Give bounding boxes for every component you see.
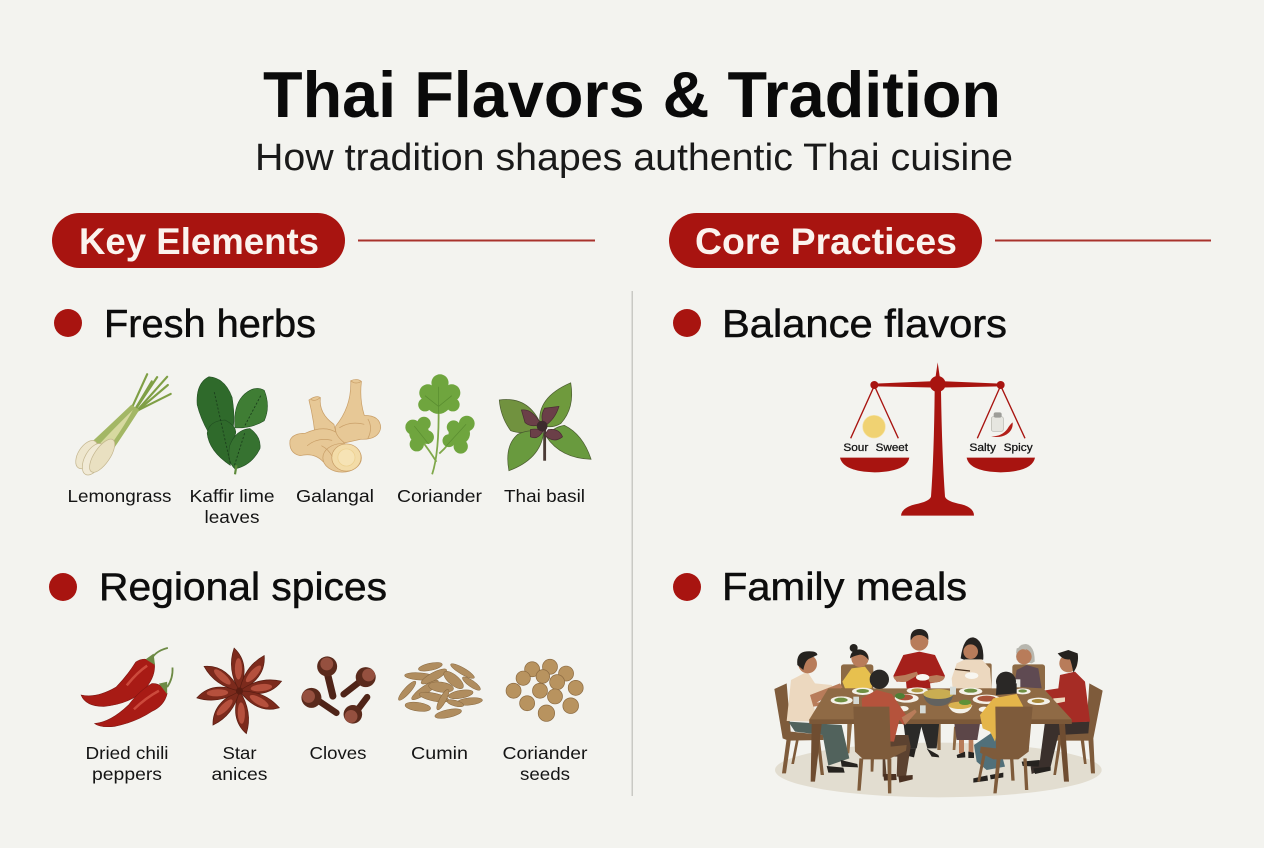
section heading: core practices [669, 213, 1211, 268]
label: star anices: Star [222, 743, 257, 763]
label: dried chili peppers [86, 743, 168, 784]
label: dried chili peppers: peppers [92, 764, 162, 784]
label: star anices [212, 743, 268, 784]
labels: sour and sweet: Sour [843, 442, 869, 454]
icon: dried chili peppers [81, 648, 173, 727]
label: kaffir lime leaves: leaves [204, 507, 260, 527]
person: front right child [973, 672, 1023, 783]
icon: coriander [405, 374, 475, 474]
labels: sour and sweet: Sweet [876, 442, 908, 454]
right chair [1053, 683, 1103, 775]
section heading: key elements [52, 213, 595, 268]
label: coriander seeds [502, 743, 588, 784]
subsection heading: balance flavors: Balance flavors [722, 303, 1007, 346]
section heading: key elements: Key Elements [79, 221, 319, 262]
chart: balance scale [840, 362, 1035, 516]
label: thai basil: Thai basil [504, 486, 585, 506]
section heading: core practices: Core Practices [695, 221, 957, 262]
label: cumin: Cumin [411, 743, 468, 763]
icon: cumin [396, 661, 483, 720]
person: center man [893, 629, 945, 757]
icon: cloves [301, 656, 376, 724]
subtitle: How tradition shapes authentic Thai cuisine [255, 137, 1013, 179]
labels: sour and sweet [843, 442, 908, 454]
label: galangal: Galangal [296, 486, 374, 506]
icon: coriander seeds [506, 659, 583, 721]
label: coriander seeds: seeds [520, 764, 570, 784]
icon: thai basil [499, 383, 591, 471]
panel: key elements [49, 213, 595, 784]
person: front left child [862, 670, 917, 783]
person: left man [787, 651, 858, 773]
label: star anices: anices [212, 764, 268, 784]
illustration: family meal around a table [774, 629, 1103, 797]
panel: core practices [669, 213, 1211, 797]
icon: lemon [863, 415, 885, 438]
left chair [774, 683, 824, 775]
back chairs [841, 663, 1045, 753]
label: kaffir lime leaves: Kaffir lime [190, 486, 274, 506]
labels: salty and spicy [969, 442, 1033, 454]
labels: salty and spicy: Spicy [1004, 442, 1033, 454]
front chairs [853, 707, 1033, 793]
subsection heading: family meals: Family meals [722, 566, 967, 609]
title: Thai Flavors & Tradition [263, 58, 1001, 131]
icon: salt shaker [991, 412, 1003, 431]
subsection heading: regional spices: Regional spices [99, 566, 387, 609]
label: coriander seeds: Coriander [502, 743, 588, 763]
labels: salty and spicy: Salty [969, 442, 997, 454]
table dishes [831, 687, 1050, 713]
person: girl [842, 644, 873, 688]
person: right man [1022, 650, 1090, 774]
person: grandmother [1014, 644, 1042, 688]
icon: lemongrass [71, 374, 171, 479]
label: kaffir lime leaves [190, 486, 274, 527]
label: dried chili peppers: Dried chili [86, 743, 168, 763]
label: lemongrass: Lemongrass [68, 486, 172, 506]
table [809, 688, 1072, 782]
icon: star anise [197, 648, 283, 734]
person: woman [952, 637, 992, 758]
icon: kaffir lime leaves [197, 377, 267, 474]
label: coriander: Coriander [397, 486, 482, 506]
icon: chili [991, 422, 1013, 437]
subsection heading: fresh herbs: Fresh herbs [104, 303, 316, 346]
label: cloves: Cloves [310, 743, 367, 763]
icon: galangal [290, 379, 381, 472]
